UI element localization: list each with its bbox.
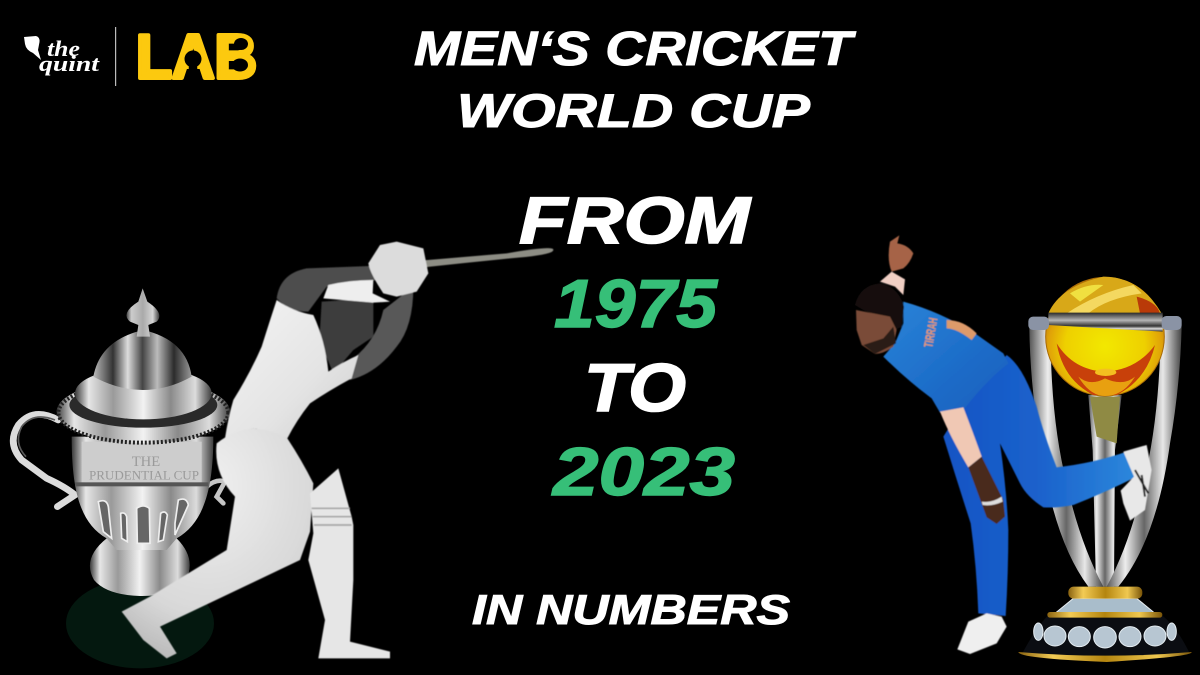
trophy engraved band [82, 442, 202, 482]
trophy engraved inscription: THE [132, 454, 160, 470]
bowler hair [855, 283, 904, 330]
illustration: batter playing a drive [122, 242, 553, 658]
bowler back shoe [1121, 445, 1152, 521]
year: 2023: 2023 [551, 434, 735, 510]
bowler jersey [883, 302, 1008, 413]
bowler raised hand [889, 235, 913, 272]
bowler face [856, 310, 897, 354]
trophy right handle [207, 481, 225, 503]
illustration: Prudential Cup trophy [13, 288, 230, 668]
cup base [1023, 615, 1189, 656]
logo text: the quint [39, 36, 100, 76]
globe red swirl [1057, 343, 1155, 395]
batter gloves [368, 242, 428, 297]
cup golden globe [1046, 277, 1164, 396]
bowler forearm and hand [968, 457, 1005, 524]
batter leg pad [308, 468, 390, 658]
illustration: ICC World Cup trophy [1018, 277, 1192, 662]
cup left column [1029, 327, 1103, 587]
batter front arm [350, 287, 413, 380]
heading: from: FROM [519, 183, 752, 257]
cup base gold bottom ring [1018, 652, 1192, 662]
icon: quint speech bubble [24, 36, 41, 60]
logo text: LAB: LAB [136, 23, 257, 92]
bowler wristband [880, 272, 905, 295]
cup base gold top ring [1068, 587, 1142, 599]
trophy plinth [66, 578, 214, 668]
jersey number mark [947, 320, 977, 340]
trophy left handle [13, 414, 75, 507]
trophy foot [90, 538, 190, 596]
jersey name print: TIRRAH [922, 317, 941, 349]
logo text: the quint: quint [39, 51, 100, 76]
batter pad stripes [312, 508, 352, 525]
trophy bowl [72, 437, 213, 550]
title: Men's Cricket World Cup [414, 23, 856, 137]
batter face [320, 298, 373, 373]
illustration: bowler in India kit [855, 235, 1152, 654]
trophy finial [126, 288, 159, 337]
logo: The Quint Lab [24, 23, 257, 92]
trophy engraved inscription [89, 454, 199, 482]
cup central stem [1088, 395, 1122, 587]
batter trousers and back leg [122, 428, 313, 658]
year: 1975: 1975 [554, 266, 718, 342]
trophy gadrooned rim [57, 380, 230, 443]
trophy bowl flutes [98, 499, 188, 543]
cup base silver medallions [1034, 623, 1176, 648]
shoe stripes [1135, 470, 1148, 497]
cup base gold mid ring [1047, 612, 1162, 618]
batter back arm [277, 266, 377, 312]
title: Men's Cricket World Cup: WORLD CUP [457, 84, 811, 137]
cup right column [1107, 327, 1182, 587]
trophy lid [75, 367, 212, 419]
cup ring end caps [1028, 317, 1049, 330]
heading: to: TO [584, 350, 686, 426]
globe upper bands [1048, 277, 1162, 313]
batter cap [323, 280, 390, 303]
title: Men's Cricket World Cup: MEN‘S CRICKET [414, 23, 856, 76]
bowler front shoe [957, 613, 1007, 654]
logo text: the quint: the [47, 36, 80, 61]
cup top ring [1048, 313, 1163, 332]
cup base silver collar [1055, 598, 1155, 613]
trophy dome [93, 330, 192, 390]
logo divider [115, 27, 116, 86]
bowler bracelet [982, 497, 1003, 505]
batter shirt [225, 300, 358, 438]
globe centre emblem [1095, 369, 1116, 376]
bowler beard [863, 327, 896, 354]
batter bat [420, 248, 553, 267]
subheading: in numbers: IN NUMBERS [472, 586, 790, 633]
trophy engraved inscription: PRUDENTIAL CUP [89, 468, 199, 482]
bowler trousers [943, 355, 1137, 616]
bowler arm [940, 407, 982, 467]
